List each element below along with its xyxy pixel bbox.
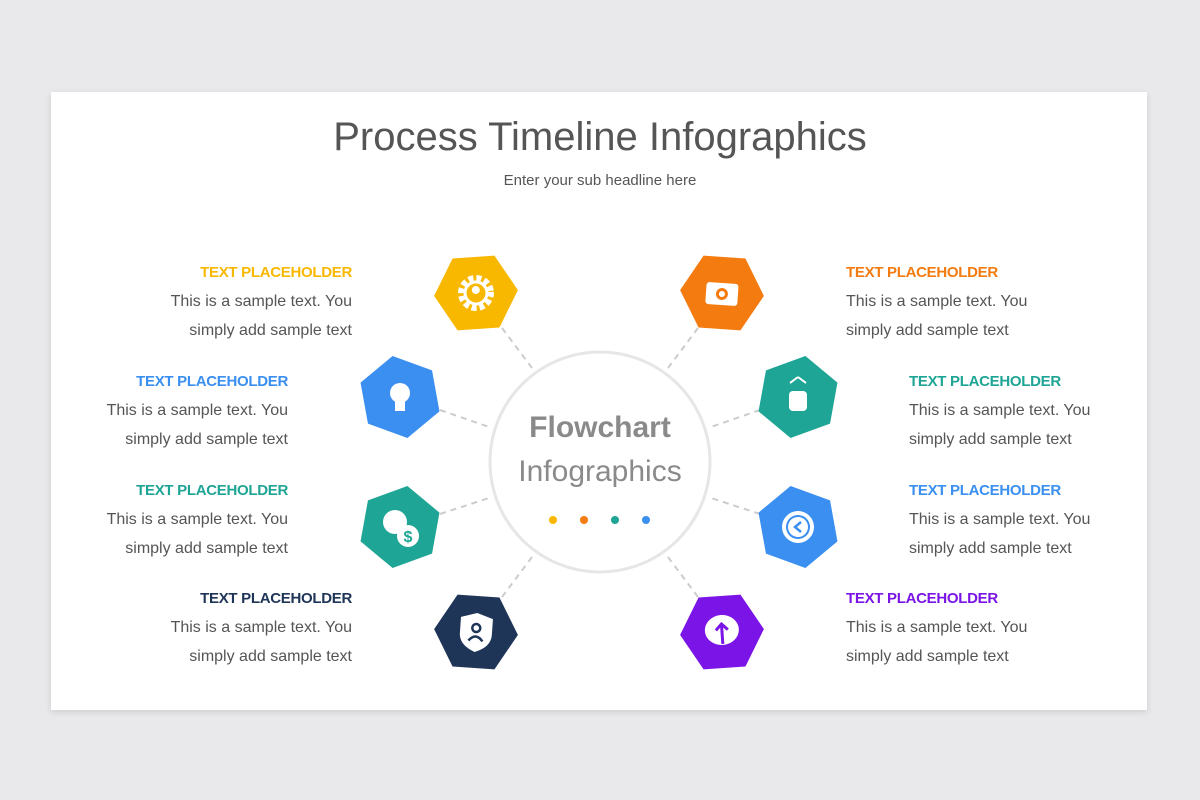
- text: purple: simply add sample text: [846, 648, 1009, 665]
- text: navy: TEXT PLACEHOLDER: [200, 590, 352, 607]
- text: orange: [846, 264, 1027, 339]
- text: purple: This is a sample text. You: [846, 619, 1027, 636]
- hex: blue clock: [746, 479, 850, 575]
- hex: teal hand: [746, 349, 850, 445]
- hex: teal pin: $: [404, 529, 413, 546]
- text: teal right: TEXT PLACEHOLDER: [909, 373, 1061, 390]
- text: yellow: simply add sample text: [189, 322, 352, 339]
- text: blue right: [909, 482, 1090, 557]
- text: blue right: simply add sample text: [909, 540, 1072, 557]
- text: blue right: This is a sample text. You: [909, 511, 1090, 528]
- text: blue left: This is a sample text. You: [107, 402, 288, 419]
- hex: orange camera: [678, 254, 766, 332]
- text: yellow: [171, 264, 352, 339]
- text: blue left: simply add sample text: [125, 431, 288, 448]
- text: teal left: [107, 482, 288, 557]
- text: purple: TEXT PLACEHOLDER: [846, 590, 998, 607]
- text: teal right: This is a sample text. You: [909, 402, 1090, 419]
- hex: yellow gear: [432, 254, 520, 332]
- center circle: [490, 352, 710, 572]
- text: orange: This is a sample text. You: [846, 293, 1027, 310]
- title: Process Timeline Infographics: [333, 115, 867, 159]
- hex: teal pin: [348, 479, 452, 575]
- text: blue right: TEXT PLACEHOLDER: [909, 482, 1061, 499]
- hex: purple brain: [678, 593, 766, 671]
- subtitle: Enter your sub headline here: [504, 172, 696, 189]
- text: purple: [846, 590, 1027, 665]
- text: teal left: TEXT PLACEHOLDER: [136, 482, 288, 499]
- hex: navy shield: [432, 593, 520, 671]
- text: orange: simply add sample text: [846, 322, 1009, 339]
- text: navy: [171, 590, 352, 665]
- connectors: [440, 328, 760, 597]
- text: teal left: simply add sample text: [125, 540, 288, 557]
- text: orange: TEXT PLACEHOLDER: [846, 264, 998, 281]
- center circle: Infographics: [518, 455, 682, 488]
- text: teal right: simply add sample text: [909, 431, 1072, 448]
- text: yellow: This is a sample text. You: [171, 293, 352, 310]
- text: yellow: TEXT PLACEHOLDER: [200, 264, 352, 281]
- hex: blue bulb: [348, 349, 452, 445]
- center circle: Flowchart: [529, 411, 671, 444]
- text: navy: simply add sample text: [189, 648, 352, 665]
- text: teal right: [909, 373, 1090, 448]
- text: teal left: This is a sample text. You: [107, 511, 288, 528]
- text: blue left: [107, 373, 288, 448]
- text: blue left: TEXT PLACEHOLDER: [136, 373, 288, 390]
- card: [51, 92, 1147, 710]
- text: navy: This is a sample text. You: [171, 619, 352, 636]
